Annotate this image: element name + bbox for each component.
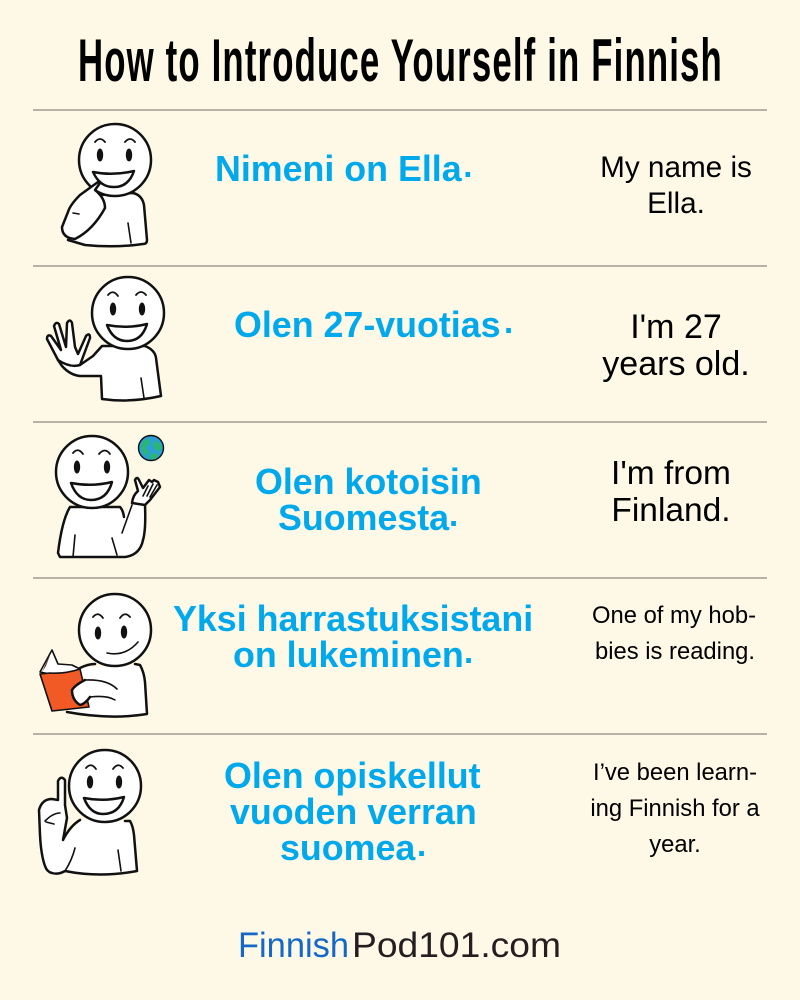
- English translation: My name is Ella: My name is: [600, 151, 752, 184]
- English translation: I've been learning Finnish for a year: year.: [649, 831, 701, 858]
- English translation: I'm 27 years old: I'm 27: [630, 308, 722, 346]
- icon: globe: [138, 436, 164, 460]
- Finnish phrase: Olen opiskellut vuoden verran suomea: .: [417, 826, 426, 863]
- row 2: age: [47, 277, 750, 400]
- English translation: I'm from Finland: [611, 455, 731, 529]
- icon: person touching chin: [62, 124, 151, 246]
- icon: open book: [40, 650, 89, 711]
- English translation: One of my hobbies is reading: One of my hob-: [592, 602, 756, 629]
- row 4: hobby: [40, 594, 756, 717]
- Finnish phrase: Olen kotoisin Suomesta: [255, 462, 482, 538]
- Finnish phrase: Olen opiskellut vuoden verran suomea: [224, 756, 481, 868]
- Finnish phrase: Olen 27-vuotias: Olen 27-vuotias: [234, 305, 501, 345]
- Finnish phrase: Olen opiskellut vuoden verran suomea: vuoden verran: [230, 792, 477, 832]
- title: How to Introduce Yourself in Finnish: [78, 28, 722, 94]
- English translation: My name is Ella: Ella.: [647, 187, 705, 220]
- icon: person with globe: [56, 436, 164, 557]
- Finnish phrase: Olen 27-vuotias: .: [504, 303, 513, 340]
- English translation: I've been learning Finnish for a year: [590, 759, 760, 858]
- English translation: My name is Ella: [600, 151, 752, 220]
- icon: person raising one finger: [39, 750, 141, 874]
- Finnish phrase: Olen kotoisin Suomesta: Olen kotoisin: [255, 462, 482, 502]
- English translation: I'm 27 years old: years old.: [602, 345, 750, 383]
- Finnish phrase: Yksi harrastuksistani on lukeminen: on lukeminen: [233, 635, 464, 675]
- English translation: One of my hobbies is reading: bies is reading.: [595, 638, 755, 665]
- footer brand: Pod101.com: [352, 926, 561, 965]
- icon: person reading a book: [40, 594, 151, 717]
- English translation: I've been learning Finnish for a year: ing Finnish for a: [590, 795, 760, 822]
- English translation: I'm from Finland: Finland.: [611, 492, 731, 529]
- English translation: I've been learning Finnish for a year: I’ve been learn-: [593, 759, 757, 786]
- Finnish phrase: Olen opiskellut vuoden verran suomea: Olen opiskellut: [224, 756, 481, 796]
- Finnish phrase: Nimeni on Ella: Nimeni on Ella: [215, 149, 463, 189]
- row 5: studying: [39, 750, 760, 874]
- Finnish phrase: Olen opiskellut vuoden verran suomea: suomea: [280, 828, 416, 868]
- English translation: I'm 27 years old: [602, 308, 750, 383]
- Finnish phrase: Yksi harrastuksistani on lukeminen: Yksi harrastuksistani: [173, 599, 533, 639]
- row 1: my name: [62, 124, 752, 246]
- English translation: I'm from Finland: I'm from: [611, 455, 731, 492]
- Finnish phrase: Olen kotoisin Suomesta: .: [449, 496, 458, 533]
- icon: person with raised open hand: [47, 277, 164, 400]
- English translation: One of my hobbies is reading: [592, 602, 756, 665]
- Finnish phrase: Olen kotoisin Suomesta: Suomesta: [278, 498, 450, 538]
- row 3: origin: [56, 436, 731, 557]
- footer brand: Finnish: [238, 926, 349, 965]
- Finnish phrase: Nimeni on Ella: .: [463, 147, 472, 184]
- Finnish phrase: Yksi harrastuksistani on lukeminen: [173, 599, 533, 675]
- Finnish phrase: Yksi harrastuksistani on lukeminen: .: [464, 633, 473, 670]
- footer brand: [238, 926, 561, 965]
